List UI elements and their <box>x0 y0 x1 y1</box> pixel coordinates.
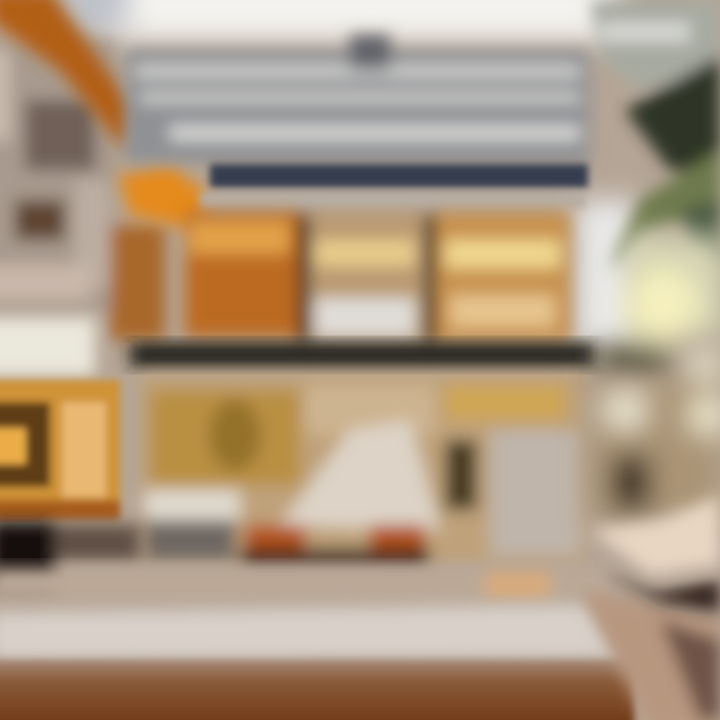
upper row windows <box>185 212 570 345</box>
lower row <box>140 374 585 564</box>
roof band <box>125 35 590 162</box>
brown sofa base <box>0 660 635 720</box>
ground <box>0 568 610 600</box>
left building wall <box>0 40 165 376</box>
sky <box>60 0 640 350</box>
orange roof beam <box>0 0 210 230</box>
white sofa <box>0 604 625 660</box>
terrace floor at right <box>580 590 720 720</box>
palm tree <box>590 0 720 270</box>
right lounge chair <box>590 495 720 612</box>
dark blue band <box>200 164 588 208</box>
left yellow box <box>0 380 120 520</box>
right lower foliage <box>590 349 720 520</box>
dark balcony band <box>130 343 595 367</box>
bright garden patch <box>600 235 720 373</box>
dark base at left <box>0 522 140 587</box>
